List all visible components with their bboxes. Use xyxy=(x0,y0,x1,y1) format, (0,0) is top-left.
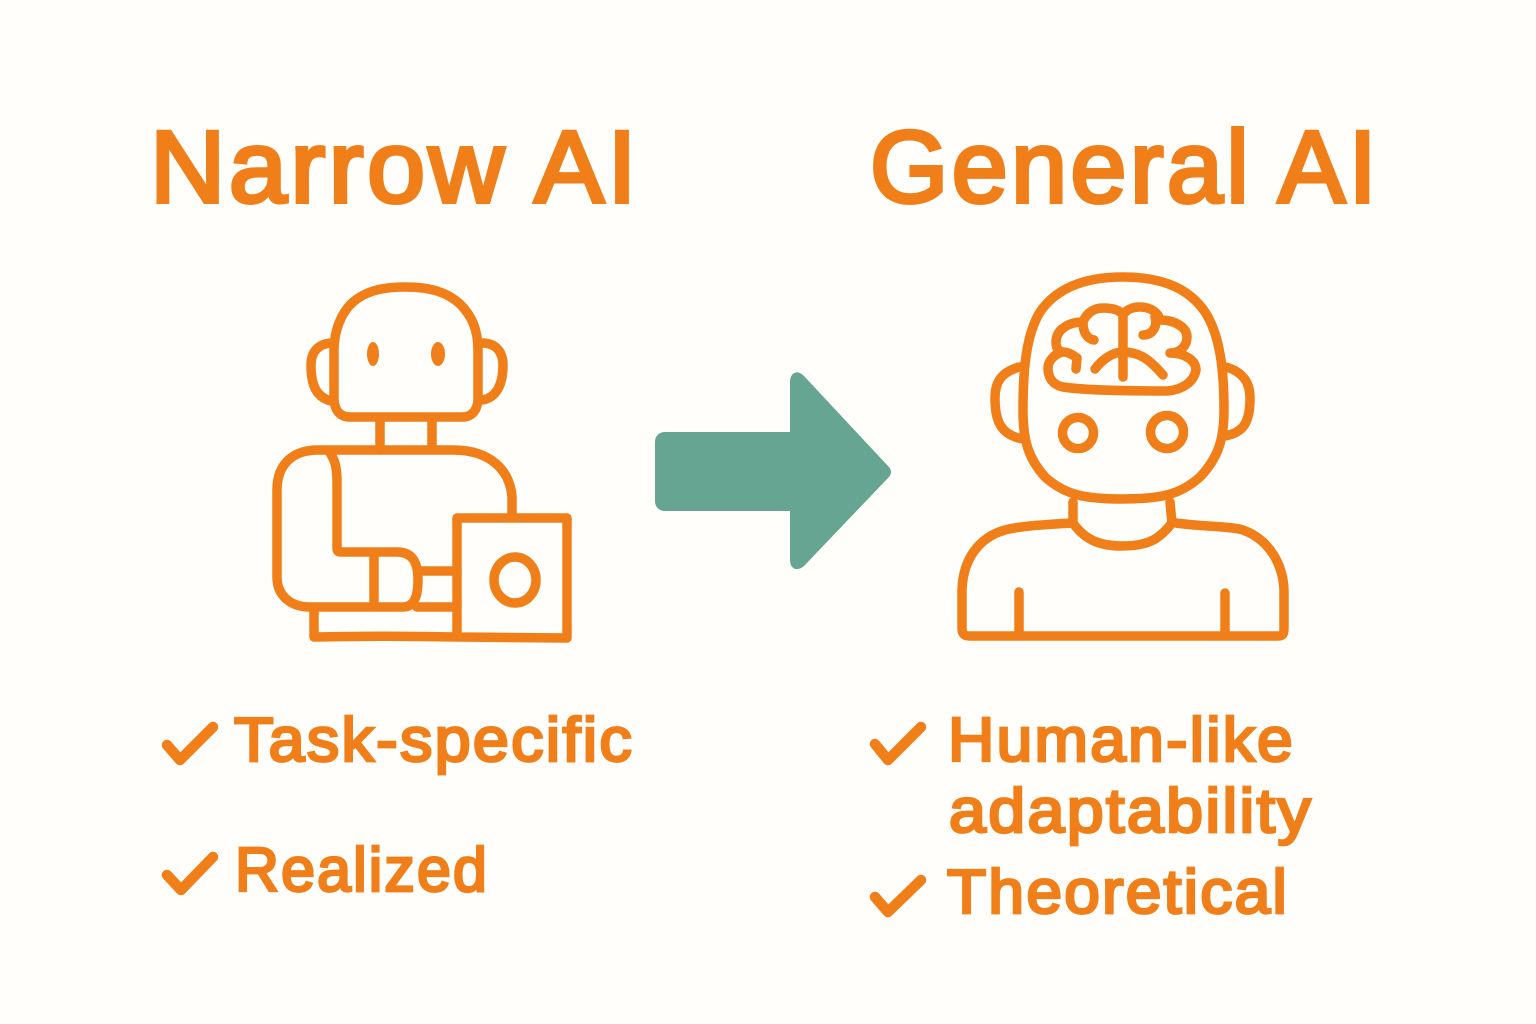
icon: check xyxy=(167,857,213,890)
text: Theoretical: Theoretical xyxy=(947,858,1289,927)
text: Human-like: Human-like xyxy=(948,706,1295,775)
icon: check xyxy=(875,880,921,912)
list: general AI traits xyxy=(875,706,1313,927)
icon: narrow AI robot eye left xyxy=(367,342,379,366)
text: Realized: Realized xyxy=(235,836,489,905)
list: narrow AI traits xyxy=(167,706,634,905)
icon: check xyxy=(167,727,213,760)
text: Task-specific: Task-specific xyxy=(234,706,634,775)
text: adaptability: adaptability xyxy=(949,777,1313,846)
icon: check xyxy=(875,727,921,760)
heading: Narrow AI: Narrow AI xyxy=(150,110,640,224)
icon: narrow AI robot eye right xyxy=(431,342,445,366)
icon: general AI human head with brain xyxy=(962,277,1284,636)
icon: narrow AI robot with task box xyxy=(277,287,567,638)
heading: General AI: General AI xyxy=(870,110,1380,224)
arrow xyxy=(655,372,891,569)
